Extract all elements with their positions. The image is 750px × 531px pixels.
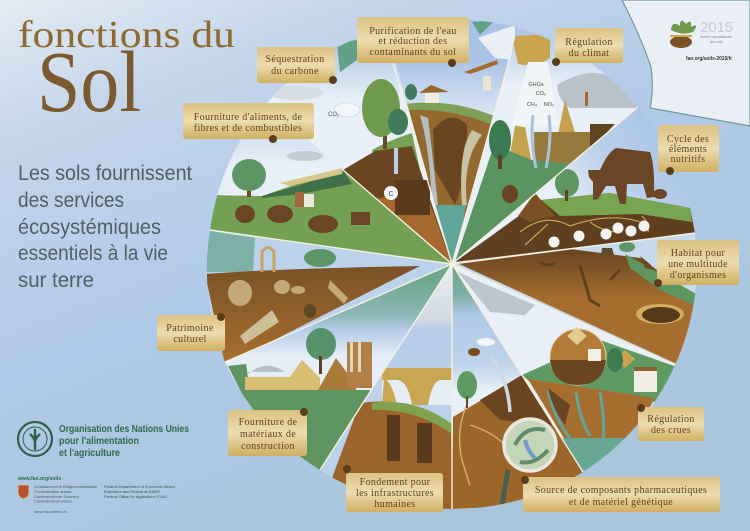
label: régulation des crues	[637, 404, 704, 441]
label: habitat	[654, 240, 739, 287]
label: patrimoine culturel	[157, 313, 225, 351]
label: fourniture d'aliments: Fourniture d'aliments, de	[194, 112, 303, 123]
panel: composants pharmaceutiques wedge	[452, 264, 585, 509]
label: patrimoine culturel: Patrimoine	[166, 323, 214, 334]
label: séquestration du carbone: du carbone	[271, 66, 319, 77]
panel: séquestration du carbone wedge	[266, 28, 452, 264]
year caption: Année internationale	[700, 35, 732, 39]
panel: séquestration du carbone wedge: CO₂	[328, 112, 340, 118]
label: habitat: Habitat pour	[671, 248, 726, 259]
year caption	[700, 35, 732, 44]
label: régulation du climat: Régulation	[565, 37, 613, 48]
label: infrastructures humaines: humaines	[374, 499, 416, 510]
label: séquestration du carbone	[257, 47, 337, 84]
Swiss office text: Federal Department of Economic Affairs,	[104, 484, 176, 489]
subtitle text block: Les sols fournissent	[18, 162, 192, 185]
label: composants pharmaceutiques: et de matériel génétique	[569, 497, 673, 508]
label: cycle des éléments nutritifs: éléments	[669, 144, 707, 155]
label: matériaux de construction: matériaux de	[240, 429, 296, 440]
label: matériaux de construction: Fourniture de	[239, 417, 298, 428]
subtitle text block: des services	[18, 189, 124, 212]
label: patrimoine culturel: culturel	[173, 334, 207, 345]
panel: matériaux de construction wedge	[225, 264, 452, 472]
top right white corner	[622, 0, 750, 126]
label: infrastructures humaines: les infrastructures	[356, 488, 434, 499]
subtitle text block	[18, 162, 192, 292]
label: régulation du climat: du climat	[569, 48, 609, 59]
FAO name text: pour l'alimentation	[59, 436, 139, 447]
title: Sol: Sol	[37, 33, 141, 130]
label: habitat: une multitude	[668, 259, 728, 270]
Swiss office text	[104, 484, 176, 499]
panel: régulation du climat wedge: CH₄	[527, 102, 538, 108]
label: matériaux de construction: construction	[241, 441, 295, 452]
label: matériaux de construction	[228, 408, 308, 456]
panel: purification de l'eau wedge	[386, 19, 518, 264]
panel: cycle des éléments nutritifs wedge	[454, 140, 695, 263]
Swiss confederation text: www.blw.admin.ch	[34, 509, 67, 514]
label: régulation des crues: Régulation	[647, 414, 695, 425]
label: purification de l'eau: et réduction des	[379, 36, 447, 47]
label: purification de l'eau: contaminants du sol	[370, 47, 456, 58]
icon: cow	[588, 148, 654, 204]
panel: fourniture d'aliments wedge	[210, 139, 450, 263]
FAO name text: et l'agriculture	[59, 448, 120, 459]
year caption: des sols	[710, 40, 723, 44]
Swiss confederation text: Confédération suisse	[34, 489, 72, 494]
icon: international year of soils logo	[670, 20, 696, 48]
Swiss confederation text: Confederazione Svizzera	[34, 494, 79, 499]
panel: habitat wedge	[452, 233, 700, 370]
icon: cutaway circle	[550, 329, 606, 385]
subtitle text block: sur terre	[18, 269, 94, 292]
Swiss confederation text: Schweizerische Eidgenossenschaft	[34, 484, 98, 489]
label: fourniture d'aliments: fibres et de combustibles	[194, 123, 302, 134]
label: infrastructures humaines: Fondement pour	[360, 477, 431, 488]
Swiss confederation text	[34, 484, 98, 514]
label: régulation du climat	[552, 28, 623, 66]
subtitle text block: essentiels à la vie	[18, 242, 168, 265]
panel: régulation du climat wedge: NO₂	[544, 102, 554, 108]
label: séquestration du carbone: Séquestration	[266, 54, 324, 65]
FAO web address: www.fao.org/soils	[17, 476, 61, 482]
label: cycle des éléments nutritifs: Cycle des	[667, 134, 709, 145]
panel: régulation des crues wedge	[452, 264, 680, 474]
icon: Swiss shield	[18, 485, 29, 499]
label: habitat: d'organismes	[670, 270, 726, 281]
year text: 2015	[700, 19, 733, 36]
panel: régulation du climat wedge: CO₂	[536, 91, 546, 97]
panel: séquestration du carbone wedge: C	[388, 191, 394, 198]
website text: fao.org/soils-2015/fr	[686, 56, 733, 62]
FAO name text	[59, 424, 189, 459]
label: fourniture d'aliments	[183, 103, 314, 143]
Swiss office text: Education and Research EAER	[104, 489, 160, 494]
spokes	[210, 50, 695, 509]
icon: FAO logo	[18, 422, 52, 456]
label: purification de l'eau: Purification de l'eau	[369, 26, 457, 37]
label: régulation des crues: des crues	[651, 425, 691, 436]
label: composants pharmaceutiques: Source de composants pharmaceutiques	[535, 485, 707, 496]
panel: infrastructures humaines wedge	[320, 264, 452, 510]
panel: patrimoine culturel wedge	[205, 230, 452, 365]
Swiss confederation text: Confederaziun svizra	[34, 498, 72, 504]
FAO name text: Organisation des Nations Unies	[59, 424, 189, 435]
label: cycle des éléments nutritifs	[658, 125, 719, 175]
Swiss office text: Federal Office for Agriculture FOAG	[104, 494, 167, 499]
icon: plane	[464, 60, 498, 91]
subtitle text block: écosystémiques	[18, 216, 161, 239]
panel: régulation du climat wedge: GHGs	[528, 82, 544, 88]
label: composants pharmaceutiques	[521, 476, 720, 512]
title: fonctions du: fonctions du	[18, 14, 235, 56]
label: infrastructures humaines	[343, 465, 443, 512]
label: purification de l'eau	[357, 17, 469, 67]
panel: régulation du climat wedge	[452, 28, 640, 264]
label: cycle des éléments nutritifs: nutritifs	[671, 154, 705, 165]
